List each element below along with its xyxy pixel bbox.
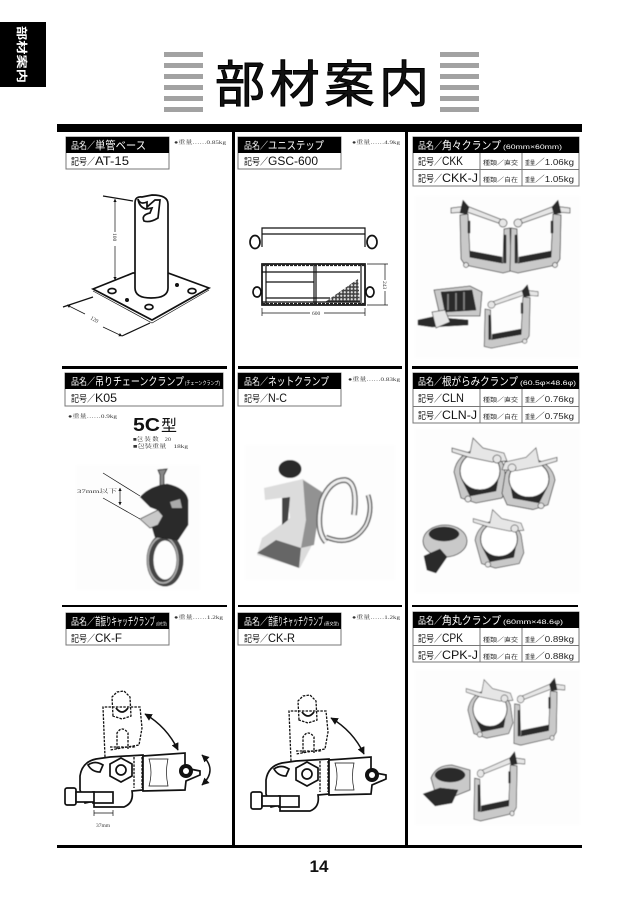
panel: CK-R xyxy=(238,613,400,811)
label CPK: 品名／ xyxy=(418,615,442,627)
label N-C: N-C xyxy=(268,393,287,405)
label K05 xyxy=(65,373,223,406)
label AT-15: 単管ベース xyxy=(95,138,146,152)
label CPK: ／0.89kg xyxy=(535,634,574,644)
label CK-R: 首振りキャッチクランプ xyxy=(268,614,323,628)
label CLN: 種類／自在 xyxy=(483,413,518,421)
label CKK: 角々クランプ xyxy=(442,139,501,152)
drawing: base plate: 120 xyxy=(89,316,99,325)
label N-C xyxy=(238,373,341,406)
weight K05: ●重量……0.9kg xyxy=(68,412,117,420)
model 5C xyxy=(133,415,188,450)
label CKK: 記号／ xyxy=(418,157,442,168)
model 5C: ■包 装 数 20 xyxy=(133,435,171,443)
label K05: 品名／ xyxy=(71,376,95,388)
title stripes left xyxy=(164,52,203,112)
drawing: right-angle catch clamp xyxy=(251,695,386,811)
panel: K05 xyxy=(65,373,223,590)
label CLN: 重量 xyxy=(525,396,535,404)
label AT-15: 記号／ xyxy=(71,157,95,168)
label CLN: ／0.75kg xyxy=(535,411,574,421)
drawing: swivel catch clamp xyxy=(65,691,200,807)
label GSC-600: 品名／ xyxy=(244,140,268,152)
label CPK xyxy=(413,612,579,662)
label CPK: 種類／自在 xyxy=(483,653,518,661)
label CPK: 記号／ xyxy=(418,651,442,662)
label CLN: CLN-J xyxy=(442,410,477,422)
label CPK: 記号／ xyxy=(418,634,442,645)
label CKK: 記号／ xyxy=(418,174,442,185)
label CPK: CPK-J xyxy=(442,650,478,662)
weight N-C: ●重量……0.83kg xyxy=(348,375,400,383)
title stripes right xyxy=(440,52,479,112)
dimension: 37mm: 37mm以下 xyxy=(77,487,118,495)
title text: 部材案内 xyxy=(215,57,429,113)
label CK-F: CK-F xyxy=(95,633,122,645)
label CK-R xyxy=(238,613,341,645)
dimension 37mm: 37mm xyxy=(96,823,111,829)
label CPK: CPK xyxy=(442,633,463,645)
label CLN: 記号／ xyxy=(418,394,442,405)
label N-C: 記号／ xyxy=(244,394,268,405)
label AT-15: 品名／ xyxy=(71,140,95,152)
label CKK: 品名／ xyxy=(418,140,442,152)
label CKK: 重量 xyxy=(525,159,535,167)
drawing: step side view xyxy=(250,228,377,248)
label CPK: 種類／直交 xyxy=(483,636,518,644)
label CPK: (60mm×48.6φ) xyxy=(503,620,563,626)
label GSC-600: 記号／ xyxy=(244,157,268,168)
label CKK: ／1.05kg xyxy=(535,174,574,184)
label GSC-600: GSC-600 xyxy=(268,156,318,168)
label CLN: CLN xyxy=(442,393,464,405)
drawing: base plate: 100 xyxy=(111,233,117,242)
panel: CKK xyxy=(413,137,580,358)
dimension 37mm xyxy=(94,810,113,829)
label CPK: ／0.88kg xyxy=(535,651,574,661)
label K05: (チェーンクランプ) xyxy=(185,380,220,387)
label CPK: 重量 xyxy=(525,636,535,644)
label CLN: (60.5φ×48.6φ) xyxy=(520,381,576,387)
panel: CK-F xyxy=(65,613,223,829)
label CKK: (60mm×60mm) xyxy=(503,145,562,151)
label CLN xyxy=(413,373,579,423)
rotation arrow xyxy=(202,755,210,785)
drawing: step plan view xyxy=(253,264,388,317)
label CLN: 品名／ xyxy=(418,376,442,388)
label AT-15: AT-15 xyxy=(95,156,129,168)
panel: CPK xyxy=(413,612,580,825)
section tab xyxy=(0,22,46,87)
label CK-R: (直交型) xyxy=(324,620,340,626)
label K05: 吊りチェーンクランプ xyxy=(95,375,184,388)
model 5C: ■包装重量 18kg xyxy=(133,442,188,450)
title xyxy=(164,52,479,113)
label GSC-600 xyxy=(238,137,341,169)
photo: square-round clamps xyxy=(415,670,580,825)
label CK-F: 首振りキャッチクランプ xyxy=(95,614,155,628)
label CLN: 記号／ xyxy=(418,411,442,422)
label CLN: 重量 xyxy=(525,413,535,421)
label CK-R: 品名／ xyxy=(244,616,268,628)
label CKK: 種類／自在 xyxy=(483,176,518,184)
drawing: base plate xyxy=(63,195,209,336)
drawing: step plan view: 243 xyxy=(381,281,387,290)
label AT-15 xyxy=(66,137,169,169)
weight AT-15: ●重量……0.85kg xyxy=(174,138,226,146)
model 5C: 型 xyxy=(161,417,177,435)
page number: 14 xyxy=(310,857,329,876)
weight CK-R: ●重量……1.2kg xyxy=(352,613,400,621)
label CK-F xyxy=(66,613,169,645)
model 5C: 5C xyxy=(133,415,160,435)
weight CK-F: ●重量……1.2kg xyxy=(174,613,223,621)
label CKK: 重量 xyxy=(525,176,535,184)
label CKK: CKK-J xyxy=(442,173,478,185)
label CK-R: CK-R xyxy=(268,633,295,645)
label CKK xyxy=(413,137,579,186)
dimension: 37mm xyxy=(77,473,140,519)
label CKK: ／1.06kg xyxy=(535,157,574,167)
panel: GSC-600 xyxy=(238,137,400,317)
label CK-F: 品名／ xyxy=(71,616,95,628)
label CK-F: 記号／ xyxy=(71,634,95,645)
label N-C: ネットクランプ xyxy=(268,375,329,388)
label CKK: CKK xyxy=(442,156,463,168)
label GSC-600: ユニステップ xyxy=(268,139,324,152)
label CLN: ／0.76kg xyxy=(535,394,574,404)
label N-C: 品名／ xyxy=(244,376,268,388)
panel: AT-15 xyxy=(63,137,226,336)
label CK-R: 記号／ xyxy=(244,634,268,645)
drawing: step plan view: 600 xyxy=(312,311,320,317)
panel: N-C xyxy=(238,373,400,580)
photo: chain clamp xyxy=(76,465,200,590)
label K05: 記号／ xyxy=(71,394,95,405)
panel: CLN xyxy=(413,373,580,593)
photo: net clamp xyxy=(245,445,395,580)
photo: square clamps xyxy=(415,196,580,358)
label CPK: 重量 xyxy=(525,653,535,661)
section tab: 部材案内 xyxy=(15,26,29,83)
catalogue grid lines xyxy=(57,124,582,848)
photo: right-angle round clamps xyxy=(415,428,580,593)
label CKK: 種類／直交 xyxy=(483,159,518,167)
label CPK: 角丸クランプ xyxy=(442,614,501,627)
label CK-F: (自在型) xyxy=(156,620,167,626)
weight GSC-600: ●重量……4.9kg xyxy=(352,138,400,146)
label K05: K05 xyxy=(95,393,117,405)
label CLN: 種類／直交 xyxy=(483,396,518,404)
label CLN: 根がらみクランプ xyxy=(442,374,518,388)
